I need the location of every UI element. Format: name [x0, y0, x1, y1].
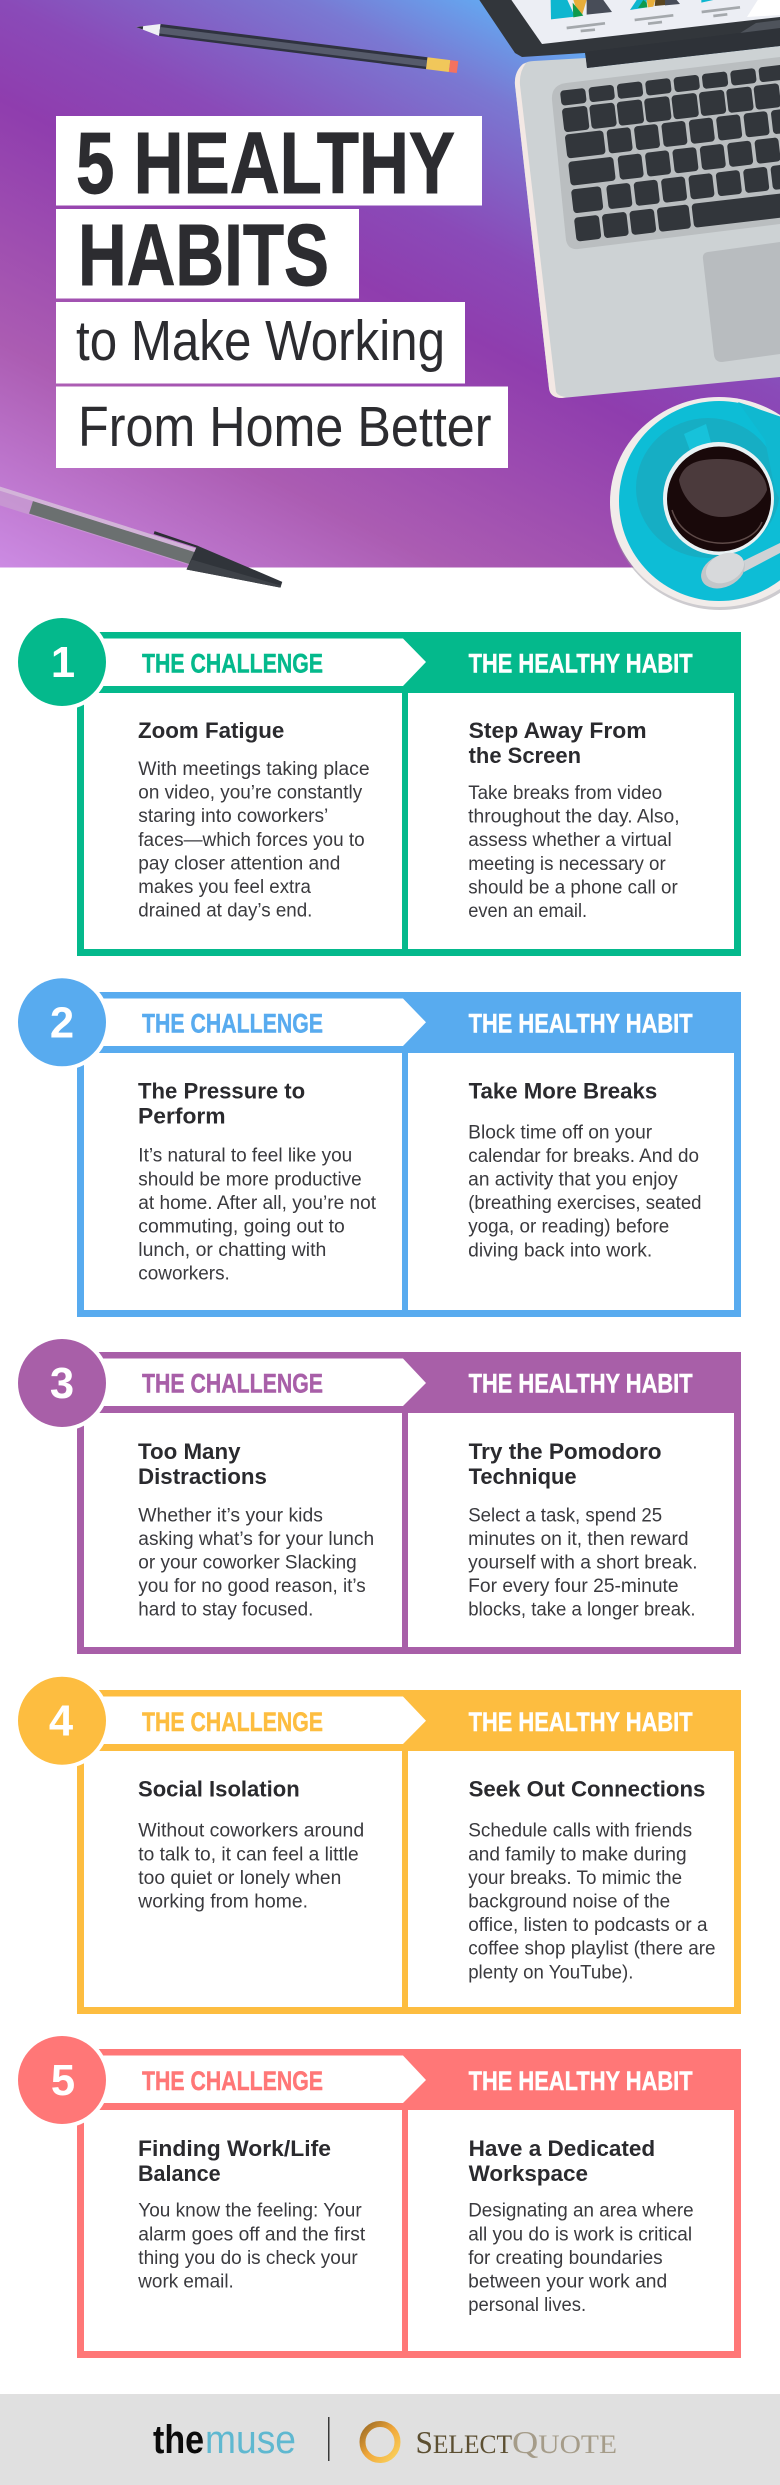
habit heading — [469, 1439, 662, 1489]
number badge 4: 4 — [49, 1698, 74, 1746]
habit text: Take breaks from video — [468, 783, 662, 804]
habit heading: Workspace — [469, 2161, 588, 2186]
challenge text: on video, you’re constantly — [138, 783, 363, 804]
habit text: For every four 25-minute — [468, 1576, 679, 1597]
panel frame — [77, 1690, 741, 2014]
panel 3: too many distractions — [14, 1335, 741, 1654]
title line: to Make Working: to Make Working — [76, 309, 445, 373]
title line: 5 Healthy: 5 HEALTHY — [76, 115, 455, 212]
habit text: even an email. — [468, 901, 587, 922]
challenge heading: Balance — [138, 2161, 221, 2186]
healthy habit header: THE HEALTHY HABIT — [469, 649, 693, 679]
challenge header: THE CHALLENGE — [142, 1009, 323, 1039]
habit heading: Try the Pomodoro — [469, 1439, 662, 1464]
challenge header: THE CHALLENGE — [142, 649, 323, 679]
habit heading: the Screen — [469, 743, 581, 768]
title line: to Make Working — [56, 302, 465, 384]
habit text: yourself with a short break. — [468, 1552, 698, 1574]
spoon — [741, 543, 780, 572]
healthy habit header: THE HEALTHY HABIT — [469, 1009, 693, 1039]
habit text: personal lives. — [468, 2295, 586, 2316]
habit text: diving back into work. — [468, 1240, 652, 1261]
number badge 1: 1 — [51, 639, 75, 687]
challenge heading — [138, 1439, 267, 1489]
logo: SelectQuote: QUOTE — [512, 2424, 617, 2460]
habit text: an activity that you enjoy — [468, 1170, 678, 1190]
habit text: meeting is necessary or — [468, 854, 666, 875]
habit text: should be a phone call or — [468, 877, 678, 898]
screen charts — [551, 0, 575, 19]
habit text: Select a task, spend 25 — [468, 1505, 662, 1526]
footer — [0, 2394, 780, 2485]
challenge heading: Too Many — [138, 1439, 241, 1464]
panel 2: pressure to perform — [14, 974, 741, 1317]
panel frame — [77, 992, 741, 1317]
title — [56, 115, 508, 468]
habit text: blocks, take a longer break. — [468, 1600, 696, 1621]
challenge text: working from home. — [137, 1892, 308, 1912]
challenge text: to talk to, it can feel a little — [138, 1844, 359, 1865]
healthy habit header: THE HEALTHY HABIT — [469, 2066, 693, 2096]
challenge text: With meetings taking place — [138, 759, 370, 780]
habit text: throughout the day. Also, — [468, 807, 680, 828]
challenge header: THE CHALLENGE — [142, 2066, 323, 2096]
logo divider — [328, 2417, 330, 2461]
habit text — [468, 1821, 716, 1983]
habit heading: Technique — [469, 1464, 577, 1489]
challenge text: commuting, going out to — [138, 1216, 345, 1238]
challenge text: makes you feel extra — [138, 877, 311, 898]
keyboard tray — [552, 57, 780, 249]
habit text: between your work and — [468, 2272, 667, 2292]
challenge text: alarm goes off and the first — [138, 2224, 366, 2245]
challenge text: Without coworkers around — [138, 1821, 364, 1842]
habit text — [468, 783, 680, 922]
habit text: all you do is work is critical — [468, 2224, 692, 2245]
challenge text: drained at day’s end. — [138, 901, 312, 922]
healthy habit header: THE HEALTHY HABIT — [469, 1369, 693, 1399]
challenge heading: The Pressure to — [138, 1078, 305, 1103]
challenge text: or your coworker Slacking — [138, 1552, 357, 1574]
icon: coffee cup on saucer — [610, 397, 780, 610]
challenge text: staring into coworkers’ — [138, 806, 328, 827]
habit text: your breaks. To mimic the — [468, 1868, 682, 1889]
challenge text: hard to stay focused. — [138, 1600, 313, 1621]
healthy habit header: THE HEALTHY HABIT — [469, 1707, 693, 1737]
habit text: background noise of the — [468, 1892, 670, 1912]
challenge heading: Finding Work/Life — [138, 2136, 331, 2161]
habit text: Block time off on your — [468, 1122, 653, 1143]
habit text: Designating an area where — [468, 2201, 694, 2222]
challenge heading — [138, 2136, 331, 2186]
challenge heading: Zoom Fatigue — [138, 718, 284, 743]
challenge heading — [138, 1078, 305, 1128]
challenge text: It’s natural to feel like you — [138, 1146, 352, 1167]
logo: the muse: muse — [205, 2418, 296, 2462]
number badge 3: 3 — [50, 1360, 74, 1408]
title line: From Home Better — [56, 386, 508, 468]
logo: the muse: the — [153, 2418, 204, 2462]
title line: From Home Better: From Home Better — [78, 395, 492, 459]
challenge heading: Social Isolation — [138, 1777, 300, 1802]
challenge text: too quiet or lonely when — [138, 1868, 341, 1889]
trackpad — [703, 242, 780, 362]
challenge header: THE CHALLENGE — [142, 1707, 323, 1737]
habit text: office, listen to podcasts or a — [468, 1915, 708, 1936]
challenge text: Whether it’s your kids — [138, 1505, 323, 1526]
number badge 5 — [14, 2032, 110, 2128]
number badge 1 — [14, 614, 110, 710]
challenge header: THE CHALLENGE — [142, 1369, 323, 1399]
challenge text — [138, 1505, 374, 1621]
habit text: yoga, or reading) before — [468, 1217, 669, 1238]
habit text: coffee shop playlist (there are — [468, 1939, 716, 1960]
habit text: and family to make during — [468, 1844, 687, 1865]
challenge text — [137, 2201, 366, 2292]
challenge text: should be more productive — [138, 1169, 362, 1190]
habit heading — [469, 718, 647, 768]
logo: the muse — [153, 2418, 296, 2462]
challenge text: at home. After all, you’re not — [138, 1193, 377, 1214]
logo: SelectQuote — [362, 2424, 617, 2460]
panel 1: zoom fatigue — [14, 614, 741, 956]
laptop base — [515, 46, 780, 398]
icon: pen — [0, 481, 285, 598]
title line: Habits: HABITS — [78, 207, 329, 304]
habit text: minutes on it, then reward — [468, 1529, 689, 1550]
icon: laptop — [478, 0, 780, 398]
challenge text: asking what’s for your lunch — [138, 1529, 374, 1550]
habit text: calendar for breaks. And do — [468, 1146, 699, 1167]
logo: SelectQuote: SELECT — [416, 2424, 512, 2460]
habit text: assess whether a virtual — [468, 830, 672, 851]
habit text: (breathing exercises, seated — [468, 1193, 702, 1214]
number badge 4 — [14, 1673, 110, 1769]
challenge heading: Perform — [138, 1103, 226, 1128]
habit text: plenty on YouTube). — [468, 1962, 633, 1983]
habit heading: Have a Dedicated — [469, 2136, 655, 2161]
number badge 2: 2 — [50, 1000, 74, 1048]
habit heading: Take More Breaks — [469, 1078, 657, 1103]
habit text: Schedule calls with friends — [468, 1821, 692, 1842]
habit text: for creating boundaries — [468, 2248, 663, 2269]
challenge text: faces—which forces you to — [138, 830, 365, 851]
challenge text — [137, 1821, 364, 1912]
icon: pencil — [135, 21, 458, 73]
habit heading — [469, 2136, 655, 2186]
challenge text: work email. — [137, 2272, 234, 2292]
habit text — [468, 1505, 698, 1621]
challenge text — [138, 1146, 377, 1285]
number badge 3 — [14, 1335, 110, 1431]
challenge text: pay closer attention and — [138, 853, 340, 874]
challenge text — [138, 759, 370, 922]
challenge text: thing you do is check your — [138, 2248, 358, 2269]
habit text — [468, 2201, 694, 2316]
habit heading: Seek Out Connections — [469, 1777, 705, 1802]
panel frame — [77, 1352, 741, 1654]
challenge text: You know the feeling: Your — [138, 2201, 362, 2222]
panel 5: work/life balance — [14, 2032, 741, 2358]
panel 4: social isolation — [14, 1673, 741, 2014]
habit heading: Step Away From — [469, 718, 647, 743]
number badge 5: 5 — [51, 2057, 75, 2105]
challenge text: you for no good reason, it’s — [138, 1576, 366, 1597]
panel frame — [77, 632, 741, 956]
keys — [551, 0, 780, 242]
challenge text: coworkers. — [138, 1264, 230, 1285]
hero background — [0, 0, 780, 568]
challenge heading: Distractions — [138, 1464, 267, 1489]
panel frame — [77, 2049, 741, 2358]
number badge 2 — [14, 974, 110, 1070]
habit text — [468, 1122, 702, 1261]
challenge text: lunch, or chatting with — [138, 1240, 326, 1261]
